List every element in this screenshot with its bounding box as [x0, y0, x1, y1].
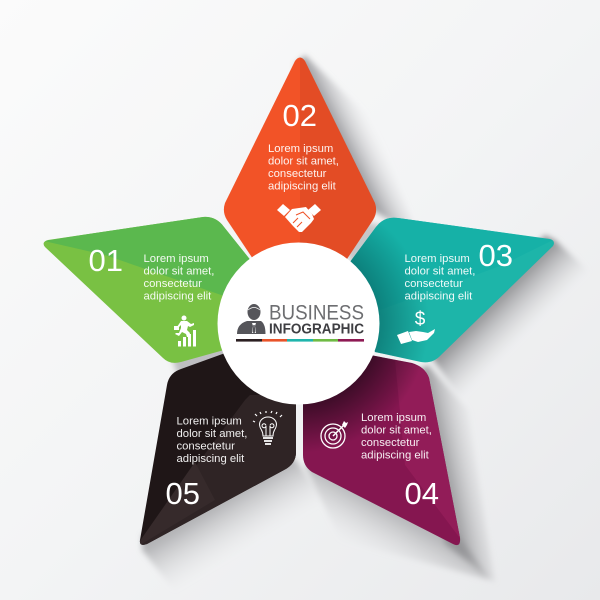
text 02: [268, 143, 339, 192]
title: business: BUSINESS: [269, 300, 364, 324]
icon: businessman: [237, 304, 266, 334]
text 02: dolor sit amet,: [268, 156, 339, 168]
center logo: [236, 300, 364, 342]
colour bar: [236, 339, 364, 342]
text 01: adipiscing elit: [144, 290, 212, 302]
number 03: 03: [478, 238, 513, 273]
text 05: [176, 416, 247, 465]
center circle: [218, 242, 380, 404]
panel 05: black: [140, 354, 296, 545]
icon: light bulb: [253, 411, 282, 444]
icon: target with arrow: [321, 421, 348, 448]
text 03: Lorem ipsum: [404, 253, 470, 265]
text 05: adipiscing elit: [176, 453, 245, 465]
text 02: Lorem ipsum: [268, 143, 333, 155]
text 02: adipiscing elit: [268, 180, 337, 192]
text 03: adipiscing elit: [404, 290, 473, 302]
text 01: dolor sit amet,: [144, 266, 214, 278]
text 04: Lorem ipsum: [361, 412, 426, 424]
text 01: consectetur: [144, 278, 202, 290]
panel 04: maroon: [303, 356, 460, 546]
text 01: Lorem ipsum: [144, 253, 209, 265]
icon: handshake: [277, 204, 321, 232]
number 01: 01: [88, 243, 123, 278]
icon: hand with dollar: [397, 309, 435, 344]
text 05: consectetur: [176, 440, 235, 452]
text 04: adipiscing elit: [361, 450, 430, 462]
number 05: 05: [166, 476, 200, 511]
icon: runner on bars: [174, 316, 196, 346]
long shadows: [142, 55, 592, 598]
number 04: 04: [404, 476, 439, 511]
icon: hand with dollar: $: [415, 309, 426, 330]
number 02: 02: [282, 98, 317, 133]
text 03: [404, 253, 475, 302]
text 04: [361, 412, 432, 462]
panel 03: teal: [350, 218, 554, 362]
title: infographic: INFOGRAPHIC: [269, 322, 364, 338]
text 03: dolor sit amet,: [404, 266, 475, 278]
panel 01: green: [44, 216, 250, 363]
text 03: consectetur: [404, 278, 463, 290]
text 01: [144, 253, 214, 302]
text 04: consectetur: [361, 437, 420, 449]
text 02: consectetur: [268, 168, 327, 180]
text 05: Lorem ipsum: [176, 416, 242, 428]
text 04: dolor sit amet,: [361, 424, 432, 436]
panel 02: red: [224, 58, 376, 259]
text 05: dolor sit amet,: [176, 428, 247, 440]
